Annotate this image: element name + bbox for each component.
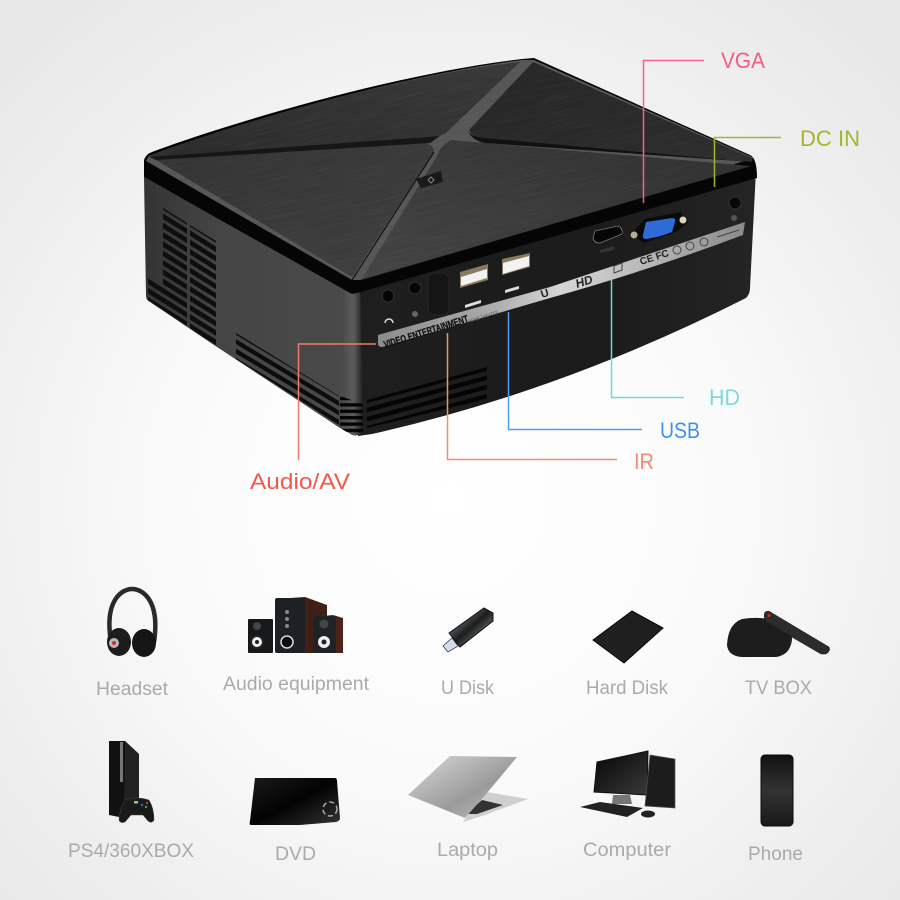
IR window <box>428 273 449 315</box>
projector left side face <box>144 177 358 435</box>
callout: USB: USB <box>660 418 700 443</box>
icon: hard disk <box>593 611 663 663</box>
device: Headset <box>96 589 169 700</box>
callout: Audio/AV: Audio/AV <box>250 469 350 494</box>
device: Audio equipment <box>223 597 370 695</box>
device: Laptop <box>408 756 528 861</box>
icon: desktop computer <box>580 751 675 818</box>
icon: DVD player <box>250 778 340 825</box>
callout: DC IN <box>714 126 860 187</box>
strip icons <box>614 230 739 273</box>
audio jacks <box>382 282 421 323</box>
device: Phone <box>748 755 803 865</box>
strip text: home theater: HOME THEATER <box>468 310 499 325</box>
right panel <box>469 62 752 162</box>
device: TV BOX <box>727 611 830 699</box>
icon: USB stick <box>443 608 493 652</box>
icon: power button <box>416 171 443 188</box>
icon: speakers <box>248 597 343 653</box>
device: TV BOX: TV BOX <box>745 678 812 699</box>
callout: VGA <box>644 48 765 203</box>
USB port 2 <box>502 253 530 293</box>
silver label strip <box>378 222 745 351</box>
strip text: video entertainment: VIDEO ENTERTAINMENT <box>383 314 470 351</box>
strip text: CE FC: CE FC <box>639 248 670 268</box>
strip text: U: U <box>539 287 551 301</box>
callout: IR <box>448 333 654 474</box>
back panel <box>150 62 520 158</box>
front panel of cover <box>361 140 751 280</box>
projector front panel <box>340 170 756 436</box>
device: Headset: Headset <box>96 679 169 700</box>
callout: USB <box>508 312 700 443</box>
DC jack <box>729 197 741 221</box>
device: Hard Disk: Hard Disk <box>586 678 668 699</box>
device: PS4/360XBOX <box>68 741 194 862</box>
device: Audio equipment: Audio equipment <box>223 674 370 695</box>
left panel <box>156 143 434 277</box>
device: PS4/360XBOX: PS4/360XBOX <box>68 841 194 862</box>
projector <box>144 58 757 436</box>
callout: DC IN: DC IN <box>800 126 860 151</box>
USB port 1 <box>460 264 488 308</box>
callout: IR: IR <box>634 449 654 474</box>
icon: phone <box>761 755 793 826</box>
device: Computer: Computer <box>583 840 672 861</box>
icon: TV box and remote <box>727 611 830 657</box>
device: Computer <box>580 751 675 861</box>
icon: game console and controller <box>109 741 154 823</box>
device: DVD <box>250 778 340 865</box>
device: U Disk <box>441 608 494 699</box>
projector top cover <box>144 58 757 294</box>
HDMI port <box>593 226 622 253</box>
device: Phone: Phone <box>748 844 803 865</box>
device: U Disk: U Disk <box>441 678 494 699</box>
device: Hard Disk <box>586 611 668 699</box>
callout: VGA: VGA <box>721 48 765 73</box>
strip text: HD: HD <box>574 272 595 291</box>
icon: headset <box>107 589 156 657</box>
device: Laptop: Laptop <box>437 840 498 861</box>
callout: HD <box>612 280 740 410</box>
callout: Audio/AV <box>250 344 376 494</box>
brushed texture <box>120 0 780 361</box>
VGA port <box>630 212 688 243</box>
callout: HD: HD <box>709 385 740 410</box>
icon: laptop <box>408 756 528 822</box>
device: DVD: DVD <box>275 844 316 865</box>
